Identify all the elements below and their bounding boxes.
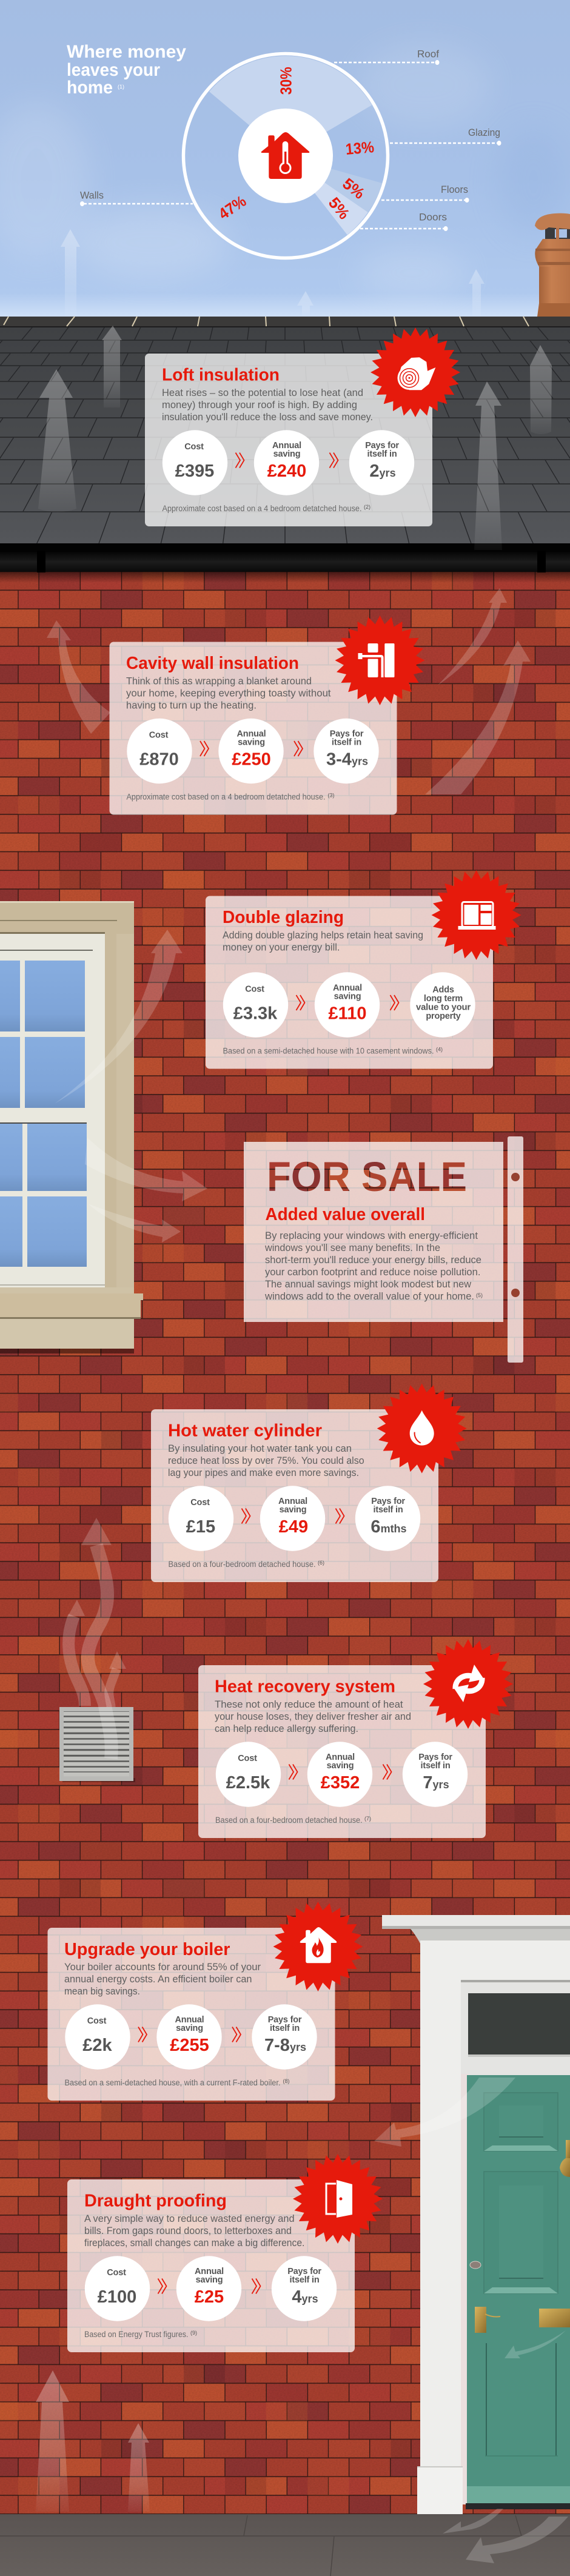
panel: cavity wall insulation — [109, 615, 424, 815]
body text: having to turn up the heating. — [126, 700, 256, 711]
arrow — [138, 2027, 147, 2042]
panel: hot water cylinder — [151, 1384, 467, 1582]
body text — [223, 929, 423, 953]
window — [0, 901, 143, 1353]
arrow — [158, 2279, 166, 2293]
stat: payback — [252, 2004, 317, 2070]
stat: cost: Cost — [107, 2268, 126, 2278]
stat: annual saving: saving — [196, 2275, 223, 2285]
footnote: (3) — [327, 792, 335, 798]
stat: annual saving: saving — [280, 1505, 306, 1515]
stat: payback: Pays for — [371, 1497, 405, 1506]
stat: annual saving: £255 — [170, 2036, 209, 2055]
icon: open door — [293, 2154, 383, 2244]
stat: payback: Pays for — [268, 2015, 302, 2025]
body text: windows add to the overall value of your home. — [264, 1290, 474, 1302]
body text: (5) — [476, 1292, 483, 1298]
door surround — [382, 1915, 570, 2515]
stat: annual saving — [156, 2004, 222, 2070]
label: 5 percent doors: 5% — [325, 193, 354, 223]
stat: payback: itself in — [290, 2275, 319, 2285]
heading: Upgrade your boiler — [64, 1940, 230, 1959]
background: sky — [0, 0, 570, 318]
stat: annual saving: saving — [238, 737, 265, 747]
stat: cost — [163, 430, 227, 495]
legend: glazing — [390, 127, 501, 146]
body text: By replacing your windows with energy-efficient — [265, 1230, 478, 1241]
chart: heat loss donut — [183, 53, 388, 258]
panel: draught proofing — [67, 2154, 383, 2352]
panel: double glazing — [206, 870, 521, 1068]
arrow — [200, 741, 209, 756]
stat: payback: itself in — [374, 1505, 403, 1515]
arrow — [383, 1765, 392, 1779]
stat: cost — [65, 2004, 130, 2070]
heading: where money leaves your home: leaves your — [67, 60, 160, 80]
footnote: (9) — [190, 2330, 197, 2336]
heading: Hot water cylinder — [168, 1421, 322, 1441]
label: 30 percent: 30% — [277, 67, 295, 95]
body text — [84, 2213, 304, 2249]
body text: windows you'll see many benefits. In the — [264, 1242, 440, 1253]
footnote: Approximate cost based on a 4 bedroom detatched house. — [163, 504, 361, 513]
for sale sign: post — [508, 1136, 523, 1363]
stat: cost — [216, 1742, 281, 1807]
stat: payback: 7-8yrs — [264, 2036, 306, 2055]
stat: cost — [127, 719, 192, 783]
body text: annual energy costs. An efficient boiler can — [64, 1973, 252, 1985]
body text: your carbon footprint and reduce noise pollution. — [265, 1266, 480, 1278]
arrow — [252, 2279, 261, 2293]
panel: for sale board — [244, 1142, 503, 1322]
stat: annual saving: Annual — [326, 1753, 355, 1762]
stat: payback — [349, 430, 414, 495]
arrow — [336, 1509, 344, 1523]
body text: fireplaces, small changes can make a big difference. — [84, 2237, 304, 2249]
footnote: Based on a four-bedroom detached house. — [215, 1816, 363, 1825]
arrows: heat through the window — [55, 930, 207, 1243]
heading: Draught proofing — [84, 2192, 227, 2211]
arrow — [391, 995, 399, 1010]
body text: can help reduce allergy suffering. — [215, 1723, 358, 1734]
stat: annual saving — [307, 1742, 372, 1807]
body text: money on your energy bill. — [223, 941, 340, 953]
stat: annual saving: £240 — [267, 461, 306, 481]
legend: doors: Doors — [419, 211, 447, 223]
icon: house with thermometer — [261, 132, 309, 179]
stat: cost: £15 — [186, 1517, 215, 1537]
icon: water drop — [377, 1384, 467, 1474]
arrows: heat rising from the sky line — [61, 229, 485, 316]
body text: your house loses, they deliver fresher air and — [215, 1711, 411, 1722]
label: 13 percent: 13% — [345, 138, 375, 158]
label: 5 percent floors: 5% — [339, 174, 368, 203]
heading: Cavity wall insulation — [126, 654, 299, 673]
stat: cost: £870 — [139, 750, 179, 769]
stat: cost: Cost — [87, 2016, 107, 2026]
stat: cost: £395 — [175, 461, 214, 481]
stat: annual saving: Annual — [237, 729, 266, 739]
footnote: (7) — [364, 1816, 371, 1822]
label: 47 percent: 47% — [215, 192, 249, 223]
body text: A very simple way to reduce wasted energy and — [84, 2213, 295, 2224]
stat: annual saving: Annual — [175, 2015, 204, 2025]
stat: annual saving: £49 — [279, 1517, 308, 1537]
heading: Loft insulation — [162, 365, 280, 384]
stat: annual saving — [315, 972, 380, 1038]
heading: where money leaves your home: (1) — [118, 84, 124, 90]
stat: annual saving: Annual — [333, 984, 362, 993]
stat: annual saving: £352 — [321, 1773, 360, 1793]
body text: Think of this as wrapping a blanket around — [126, 676, 312, 686]
stat: annual saving: saving — [176, 2024, 203, 2033]
heading: Double glazing — [223, 908, 344, 927]
arrows: heat from the vent — [68, 1518, 126, 1759]
legend: doors — [360, 211, 448, 231]
stat: payback: 3-4yrs — [326, 750, 368, 769]
stat: long term value: value to your — [416, 1003, 471, 1013]
stat: payback: Pays for — [330, 729, 364, 739]
stat: cost: Cost — [190, 1498, 210, 1508]
arrow — [235, 452, 244, 468]
stat: long term value: property — [426, 1011, 461, 1021]
arrow — [241, 1509, 250, 1523]
footnote: Based on a semi-detached house with 10 casement windows. — [223, 1047, 434, 1055]
body text: These not only reduce the amount of heat — [215, 1699, 403, 1710]
roof slates — [0, 327, 570, 543]
stat: payback — [403, 1742, 468, 1807]
stat: payback: 2yrs — [369, 461, 396, 481]
stat: payback: 6mths — [370, 1517, 407, 1537]
stat: payback: itself in — [332, 737, 361, 747]
arrows: heat through the walls — [47, 588, 531, 794]
roof ridge — [0, 317, 570, 329]
arrow — [289, 1765, 297, 1779]
icon: insulation roll — [370, 327, 460, 417]
stat: cost — [85, 2256, 150, 2321]
heading: Added value overall — [266, 1205, 425, 1224]
stat: payback: 7yrs — [423, 1773, 449, 1793]
stat: long term value: long term — [424, 994, 463, 1004]
icon: house with flame — [273, 1902, 363, 1991]
footnote: Based on a semi-detached house, with a current F-rated boiler. — [64, 2078, 280, 2087]
stat: annual saving: £110 — [329, 1004, 366, 1024]
stat: long term value — [410, 972, 475, 1038]
body text: lag your pipes and make even more savings. — [168, 1467, 359, 1478]
body text — [264, 1230, 483, 1302]
body text: bills. From gaps round doors, to letterboxes and — [84, 2225, 292, 2236]
stat: payback: itself in — [270, 2024, 300, 2033]
stat: annual saving: saving — [273, 449, 300, 459]
stat: cost: £3.3k — [233, 1004, 278, 1024]
icon: recycling arrows — [423, 1639, 513, 1729]
stat: annual saving: Annual — [278, 1497, 307, 1506]
footnote: Approximate cost based on a 4 bedroom detatched house. — [126, 792, 325, 802]
legend: walls: Walls — [80, 189, 104, 201]
panel: upgrade your boiler — [47, 1902, 363, 2101]
stat: payback: Pays for — [287, 2267, 321, 2276]
footnote: (6) — [318, 1560, 324, 1566]
body text: Adding double glazing helps retain heat saving — [223, 929, 423, 941]
stat: cost: £2k — [82, 2036, 113, 2055]
pavement — [0, 2514, 570, 2576]
stat: annual saving — [176, 2256, 241, 2321]
body text: Your boiler accounts for around 55% of your — [64, 1961, 261, 1973]
stat: cost: Cost — [184, 442, 204, 452]
stat: annual saving: saving — [327, 1761, 354, 1771]
stat: cost: £2.5k — [226, 1773, 270, 1793]
icon: window — [432, 870, 521, 960]
stat: annual saving — [260, 1486, 325, 1551]
stat: payback: itself in — [367, 449, 397, 459]
body text: short-term you'll reduce your energy bills, reduce — [265, 1254, 481, 1266]
arrow — [296, 995, 304, 1010]
body text — [215, 1699, 411, 1734]
footnote: (2) — [364, 504, 370, 510]
body text: money) through your roof is high. By adding — [162, 399, 357, 411]
stat: cost — [223, 972, 288, 1038]
panel: loft insulation — [145, 327, 460, 526]
panel: heat recovery system — [198, 1639, 513, 1838]
body text — [64, 1961, 261, 1997]
arrow — [294, 741, 303, 756]
icon: chimney pot — [535, 213, 570, 317]
stat: annual saving: £250 — [232, 750, 271, 769]
legend: roof: Roof — [417, 49, 439, 60]
legend: glazing: Glazing — [468, 127, 500, 138]
legend: walls — [80, 189, 193, 206]
body text: mean big savings. — [64, 1985, 140, 1997]
legend: roof — [334, 49, 439, 65]
body text: The annual savings might look modest but new — [265, 1278, 472, 1290]
stat: payback: 4yrs — [292, 2287, 318, 2307]
stat: payback: Pays for — [365, 441, 399, 451]
footnote: (4) — [436, 1047, 443, 1053]
legend: floors: Floors — [441, 184, 468, 195]
heading: Heat recovery system — [215, 1677, 395, 1697]
footnote: Based on a four-bedroom detached house. — [169, 1560, 315, 1569]
body text — [168, 1443, 364, 1478]
icon: cavity wall — [335, 615, 424, 705]
arrows: heat rising from the floor — [36, 2370, 150, 2512]
arrows: draughts through the door — [374, 2078, 568, 2563]
stat: payback — [314, 719, 379, 783]
stat: annual saving — [218, 719, 284, 783]
arrows: heat through the roof — [38, 326, 552, 550]
stat: payback: itself in — [421, 1761, 450, 1771]
body text: your home, keeping everything toasty without — [126, 688, 331, 699]
body text: insulation you'll reduce the loss and save money. — [162, 411, 373, 423]
footnote: (8) — [283, 2078, 290, 2084]
body text: Heat rises – so the potential to lose heat (and — [162, 387, 363, 398]
body text: reduce heat loss by over 75%. You could also — [168, 1455, 364, 1466]
heading: where money leaves your home — [67, 42, 186, 98]
heading: where money leaves your home: Where money — [67, 42, 186, 62]
stat: cost — [169, 1486, 233, 1551]
stat: cost: £100 — [98, 2287, 136, 2307]
stat: annual saving: Annual — [272, 441, 301, 451]
stat: annual saving: Annual — [195, 2267, 224, 2276]
stat: payback — [355, 1486, 420, 1551]
arrow — [232, 2027, 241, 2042]
knocked-out heading: FOR SALE — [267, 1153, 467, 1200]
background: brick wall — [0, 571, 570, 2515]
arrow — [330, 452, 338, 468]
gutter — [0, 543, 570, 583]
stat: cost: Cost — [238, 1754, 257, 1763]
vent — [59, 1707, 135, 1782]
stat: long term value: Adds — [432, 985, 454, 995]
footnote: Based on Energy Trust figures. — [84, 2330, 188, 2339]
stat: payback: Pays for — [418, 1753, 452, 1762]
heading: where money leaves your home: home — [67, 78, 113, 98]
body text — [162, 387, 373, 423]
stat: annual saving: saving — [334, 992, 361, 1002]
stat: payback — [272, 2256, 337, 2321]
legend: floors — [381, 184, 469, 203]
stat: cost: Cost — [245, 985, 264, 995]
stat: annual saving — [254, 430, 319, 495]
body text — [126, 676, 331, 711]
stat: cost: Cost — [149, 730, 169, 740]
body text: By insulating your hot water tank you can — [168, 1443, 352, 1454]
stat: annual saving: £25 — [195, 2287, 224, 2307]
door — [466, 2075, 570, 2509]
